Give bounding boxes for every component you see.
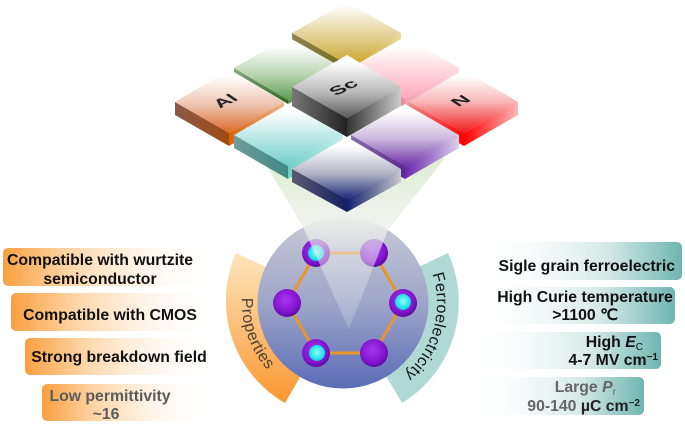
tile: Al: [175, 70, 284, 146]
box: wurtzite: [3, 248, 215, 288]
box: CMOS: Compatible with CMOS: [23, 307, 197, 324]
disc with crystal structure: [258, 218, 428, 388]
box: Ec: [470, 332, 661, 369]
box: Curie: >1100 ℃: [552, 307, 618, 324]
material tiles: [175, 2, 518, 212]
tile: yellow: [292, 2, 401, 78]
box: breakdown: [25, 338, 215, 375]
arc: ferroelectricity: [386, 253, 459, 403]
box: Ec: −1: [647, 352, 658, 363]
box: Ec: 4-7 MV cm: [568, 352, 647, 369]
box: single grain: Sigle grain ferroelectric: [499, 258, 675, 275]
box: CMOS: [11, 293, 220, 331]
box: wurtzite: Compatible with wurtzite: [7, 252, 193, 269]
ferroelectricity list: [470, 242, 682, 415]
box: Ec: C: [636, 342, 643, 353]
box: Pr: Large P: [555, 379, 613, 396]
label: Al: Al: [208, 91, 242, 110]
box: single grain: [475, 242, 682, 280]
box: Pr: [470, 377, 644, 415]
tile: Sc: [292, 55, 401, 137]
properties list: [3, 248, 220, 423]
box: Curie: [470, 287, 675, 324]
tile: N: [409, 70, 518, 146]
label: Sc: Sc: [324, 77, 362, 98]
label: Ferroelectricity: Ferroelectricity: [406, 272, 446, 380]
box: Pr: 90-140 µC cm: [527, 398, 629, 415]
box: wurtzite: semiconductor: [43, 271, 157, 288]
box: Curie: High Curie temperature: [497, 289, 673, 306]
box: permittivity: ~16: [93, 406, 120, 423]
tile: violet: [351, 104, 459, 179]
projection cone: [266, 150, 445, 329]
box: Ec: High E: [586, 334, 636, 351]
tile: teal: [234, 104, 343, 179]
box: Pr: r: [613, 387, 617, 398]
box: Pr: −2: [629, 398, 640, 409]
tile: navy: [292, 137, 401, 212]
box: permittivity: Low permittivity: [49, 388, 171, 405]
tile: green: [234, 37, 343, 104]
arc: properties: [226, 253, 300, 403]
box: permittivity: [42, 384, 215, 423]
box: breakdown: Strong breakdown field: [31, 349, 207, 366]
label: Properties: Properties: [241, 299, 272, 368]
label: N: N: [446, 92, 475, 109]
hexagonal crystal structure: [273, 239, 417, 367]
tile: pink: [351, 37, 459, 109]
